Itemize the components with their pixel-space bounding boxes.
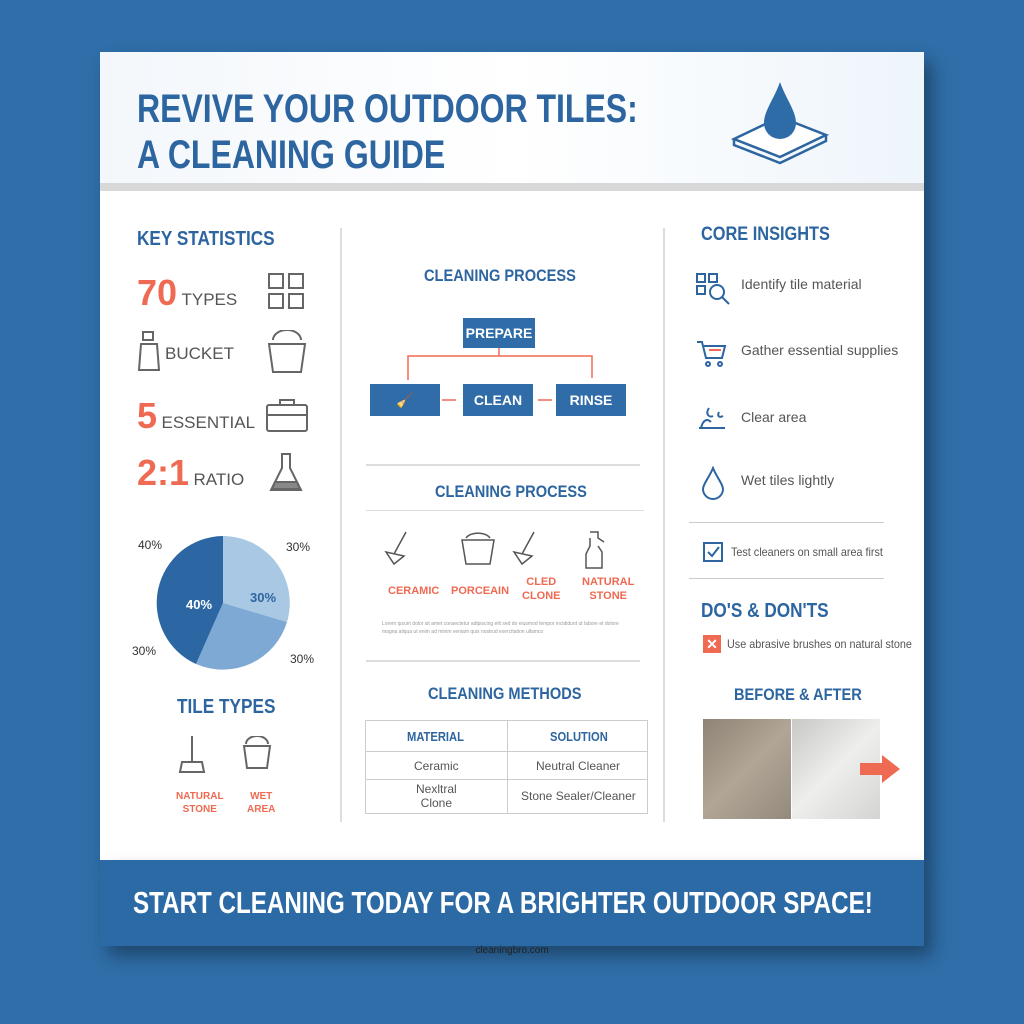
panel: key statistics (137, 228, 308, 493)
stat 70 types: 70 TYPES (137, 272, 237, 313)
panel: cleaning process materials: CERAMIC (388, 585, 439, 597)
footer banner (100, 860, 924, 946)
title: REVIVE YOUR OUTDOOR TILES: (137, 87, 638, 131)
panel: cleaning process flow (370, 266, 626, 416)
table: Nexltral (416, 782, 457, 796)
table: Neutral Cleaner (536, 759, 620, 773)
icon: mop (178, 736, 206, 773)
panel: before & after (703, 685, 900, 819)
heading: KEY STATISTICS (137, 228, 275, 250)
pie chart: 40% (138, 538, 162, 552)
source: cleaningbro.com (475, 945, 549, 956)
panel: cleaning process flow: RINSE (570, 392, 612, 408)
table (365, 720, 648, 814)
pie chart: 30% (290, 652, 314, 666)
panel: core insights: Clear area (741, 409, 806, 425)
table: Stone Sealer/Cleaner (521, 789, 636, 803)
stat 2:1 ratio (137, 452, 302, 493)
panel: core insights (689, 224, 912, 653)
panel: core insights: Use abrasive brushes on natural stone (727, 637, 912, 651)
card (100, 52, 924, 860)
stat 70 types (137, 272, 304, 313)
panel: core insights: Test cleaners on small area first (731, 545, 883, 559)
stat 5 essential: 5 ESSENTIAL (137, 395, 255, 436)
panel: cleaning process materials: STONE (589, 590, 627, 602)
panel: tile types: TILE TYPES (177, 696, 275, 718)
panel: core insights: CORE INSIGHTS (701, 224, 830, 245)
panel: cleaning process flow: PREPARE (466, 325, 532, 341)
panel: cleaning methods table (365, 684, 648, 814)
title (137, 87, 638, 177)
panel: core insights: Wet tiles lightly (741, 472, 834, 488)
panel: cleaning process flow: CLEANING PROCESS (424, 266, 576, 285)
panel: core insights: Gather essential supplies (741, 342, 898, 358)
panel: tile types: AREA (247, 804, 275, 815)
panel: cleaning methods table: CLEANING METHODS (428, 684, 582, 703)
dividers (340, 228, 342, 822)
panel: core insights: DO'S & DON'TS (701, 600, 829, 622)
table: MATERIAL (407, 729, 464, 744)
table: Clone (421, 796, 452, 810)
panel: cleaning process materials: CLED (526, 576, 556, 588)
pie chart: 30% (132, 644, 156, 658)
title: A CLEANING GUIDE (137, 133, 445, 177)
header (100, 52, 924, 184)
panel: core insights: ✕ (706, 636, 718, 652)
panel: tile types: WET (250, 791, 272, 802)
icon: bucket (242, 736, 272, 769)
panel: before & after: BEFORE & AFTER (734, 685, 862, 704)
stat 2:1 ratio: 2:1 RATIO (137, 452, 244, 493)
stat bucket (138, 330, 306, 373)
panel: core insights: Identify tile material (741, 276, 862, 292)
panel: tile types: NATURAL (176, 791, 224, 802)
icon: water drop on tile (731, 82, 829, 164)
arrow (860, 755, 900, 783)
panel: cleaning process flow: CLEAN (474, 392, 522, 408)
pie chart: 30% (250, 590, 276, 605)
panel: cleaning process materials (366, 482, 644, 635)
panel: cleaning process materials: CLONE (522, 590, 560, 602)
panel: cleaning process materials: NATURAL (582, 576, 634, 588)
table: Ceramic (414, 759, 459, 773)
pie chart: 30% (286, 540, 310, 554)
panel: cleaning process materials: PORCEAIN (451, 585, 509, 597)
stat 5 essential (137, 395, 308, 436)
footer banner: START CLEANING TODAY FOR A BRIGHTER OUTDOOR SPACE! (133, 885, 873, 920)
panel: tile types (176, 696, 275, 815)
table: SOLUTION (550, 729, 608, 744)
panel: cleaning process materials: Lorem ipsum dolor sit amet consectetur adipiscing elit sed do eiusmod tempor incididunt ut labore et dolore magna aliqua ut enim ad minim veniam quis nostrud exercitation ullamco (382, 621, 619, 635)
panel: tile types: STONE (183, 804, 217, 815)
pie chart (132, 536, 314, 670)
stat bucket: BUCKET (165, 344, 234, 363)
pie chart: 40% (186, 597, 212, 612)
panel: cleaning process materials: CLEANING PROCESS (435, 482, 587, 501)
panel: cleaning process flow: 🧹 (396, 392, 414, 408)
